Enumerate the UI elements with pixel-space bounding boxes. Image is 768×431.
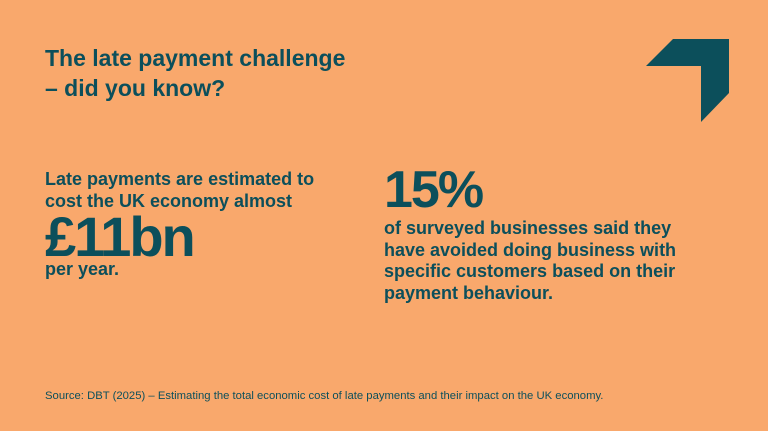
- title: – did you know?: [45, 75, 225, 101]
- text: description: payment behaviour.: [384, 282, 553, 302]
- title: [45, 45, 345, 101]
- text: per year: per year.: [45, 259, 119, 279]
- panel: £11bn stat: [45, 169, 314, 279]
- panel: 15% stat: [384, 161, 676, 303]
- title: The late payment challenge: [45, 45, 345, 71]
- text: intro: [45, 169, 314, 211]
- source: Source: DBT (2025) – Estimating the total economic cost of late payments and their impact on the UK economy.: [45, 390, 603, 402]
- figure: £11bn: £11bn: [45, 205, 194, 268]
- text: description: [384, 218, 676, 303]
- figure: 15%: 15%: [384, 161, 482, 219]
- text: description: have avoided doing business with: [384, 240, 676, 260]
- text: intro: cost the UK economy almost: [45, 190, 292, 210]
- text: intro: Late payments are estimated to: [45, 169, 314, 189]
- text: description: of surveyed businesses said they: [384, 218, 671, 238]
- text: description: specific customers based on their: [384, 261, 675, 281]
